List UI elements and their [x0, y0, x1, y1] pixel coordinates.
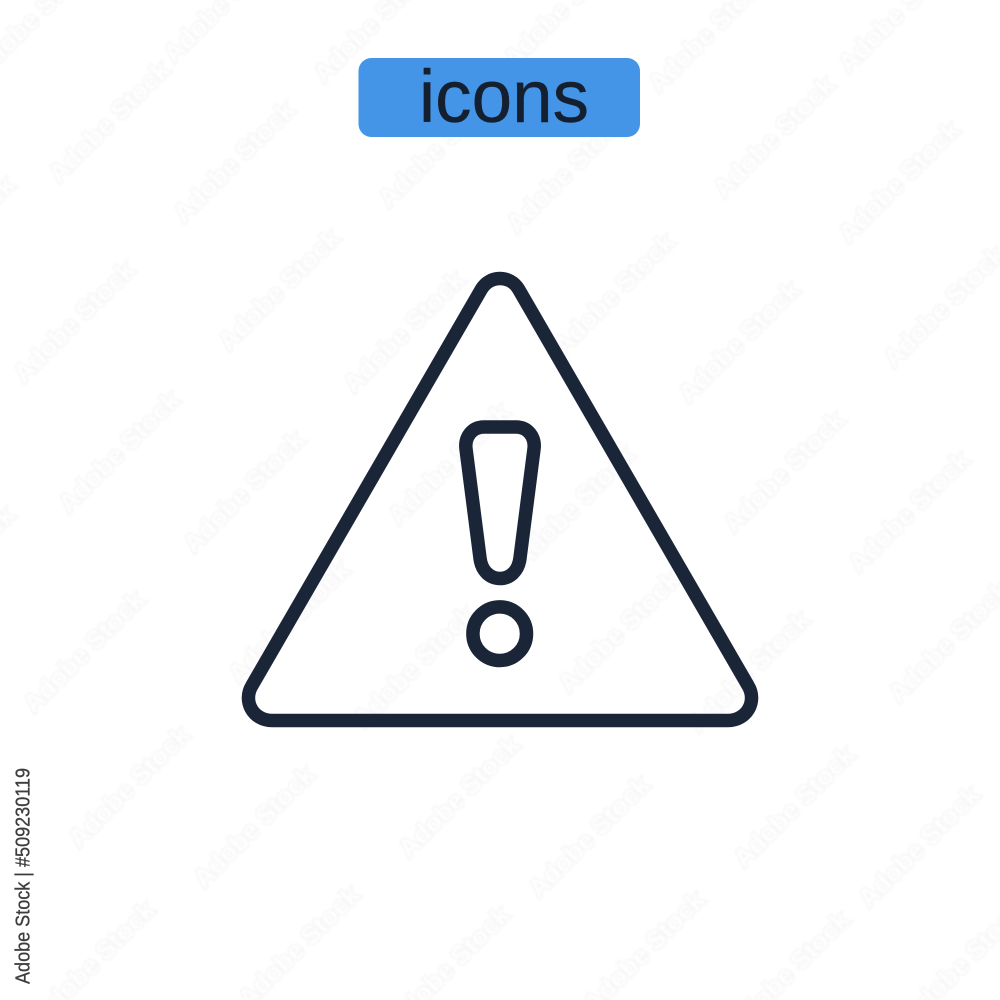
triangle outline	[248, 278, 752, 720]
exclamation mark dot	[473, 607, 526, 660]
icon: warning triangle	[248, 278, 752, 720]
watermark pattern: Adobe Stock	[682, 604, 816, 738]
watermark pattern: Adobe Stock	[717, 404, 851, 538]
watermark pattern: Adobe Stock	[727, 739, 861, 873]
watermark pattern: Adobe Stock	[552, 564, 686, 698]
watermark pattern: Adobe Stock	[222, 554, 356, 688]
badge label: icons	[419, 55, 589, 138]
watermark pattern: Adobe Stock	[382, 396, 516, 530]
watermark pattern: Adobe Stock	[62, 719, 196, 853]
watermark pattern: Adobe Stock	[672, 274, 806, 408]
side credit text: Adobe Stock | #509230119	[12, 768, 34, 984]
watermark pattern: Adobe Stock	[347, 599, 481, 733]
watermark pattern: Adobe Stock	[852, 779, 986, 913]
watermark pattern: Adobe Stock	[832, 114, 966, 248]
watermark pattern: Adobe Stock	[17, 584, 151, 718]
watermark pattern: Adobe Stock	[42, 54, 176, 188]
watermark pattern: Adobe Stock	[337, 264, 471, 398]
watermark pattern: Adobe Stock	[187, 759, 321, 893]
watermark pattern: Adobe Stock	[212, 222, 346, 356]
watermark pattern: Adobe Stock	[372, 79, 506, 213]
watermark pattern: Adobe Stock	[547, 226, 681, 360]
watermark pattern: Adobe Stock	[842, 444, 976, 578]
watermark pattern: Adobe Stock	[167, 94, 301, 228]
watermark pattern: Adobe Stock	[7, 254, 141, 388]
watermark pattern: Adobe Stock	[507, 439, 641, 573]
watermark pattern: Adobe Stock	[500, 104, 634, 238]
watermark pattern: Adobe Stock	[392, 729, 526, 863]
watermark pattern: Adobe Stock	[52, 384, 186, 518]
exclamation mark body	[466, 427, 534, 578]
watermark pattern: Adobe Stock	[177, 424, 311, 558]
icons badge	[358, 55, 640, 138]
watermark pattern: Adobe Stock	[522, 769, 656, 903]
watermark pattern: Adobe Stock	[707, 69, 841, 203]
